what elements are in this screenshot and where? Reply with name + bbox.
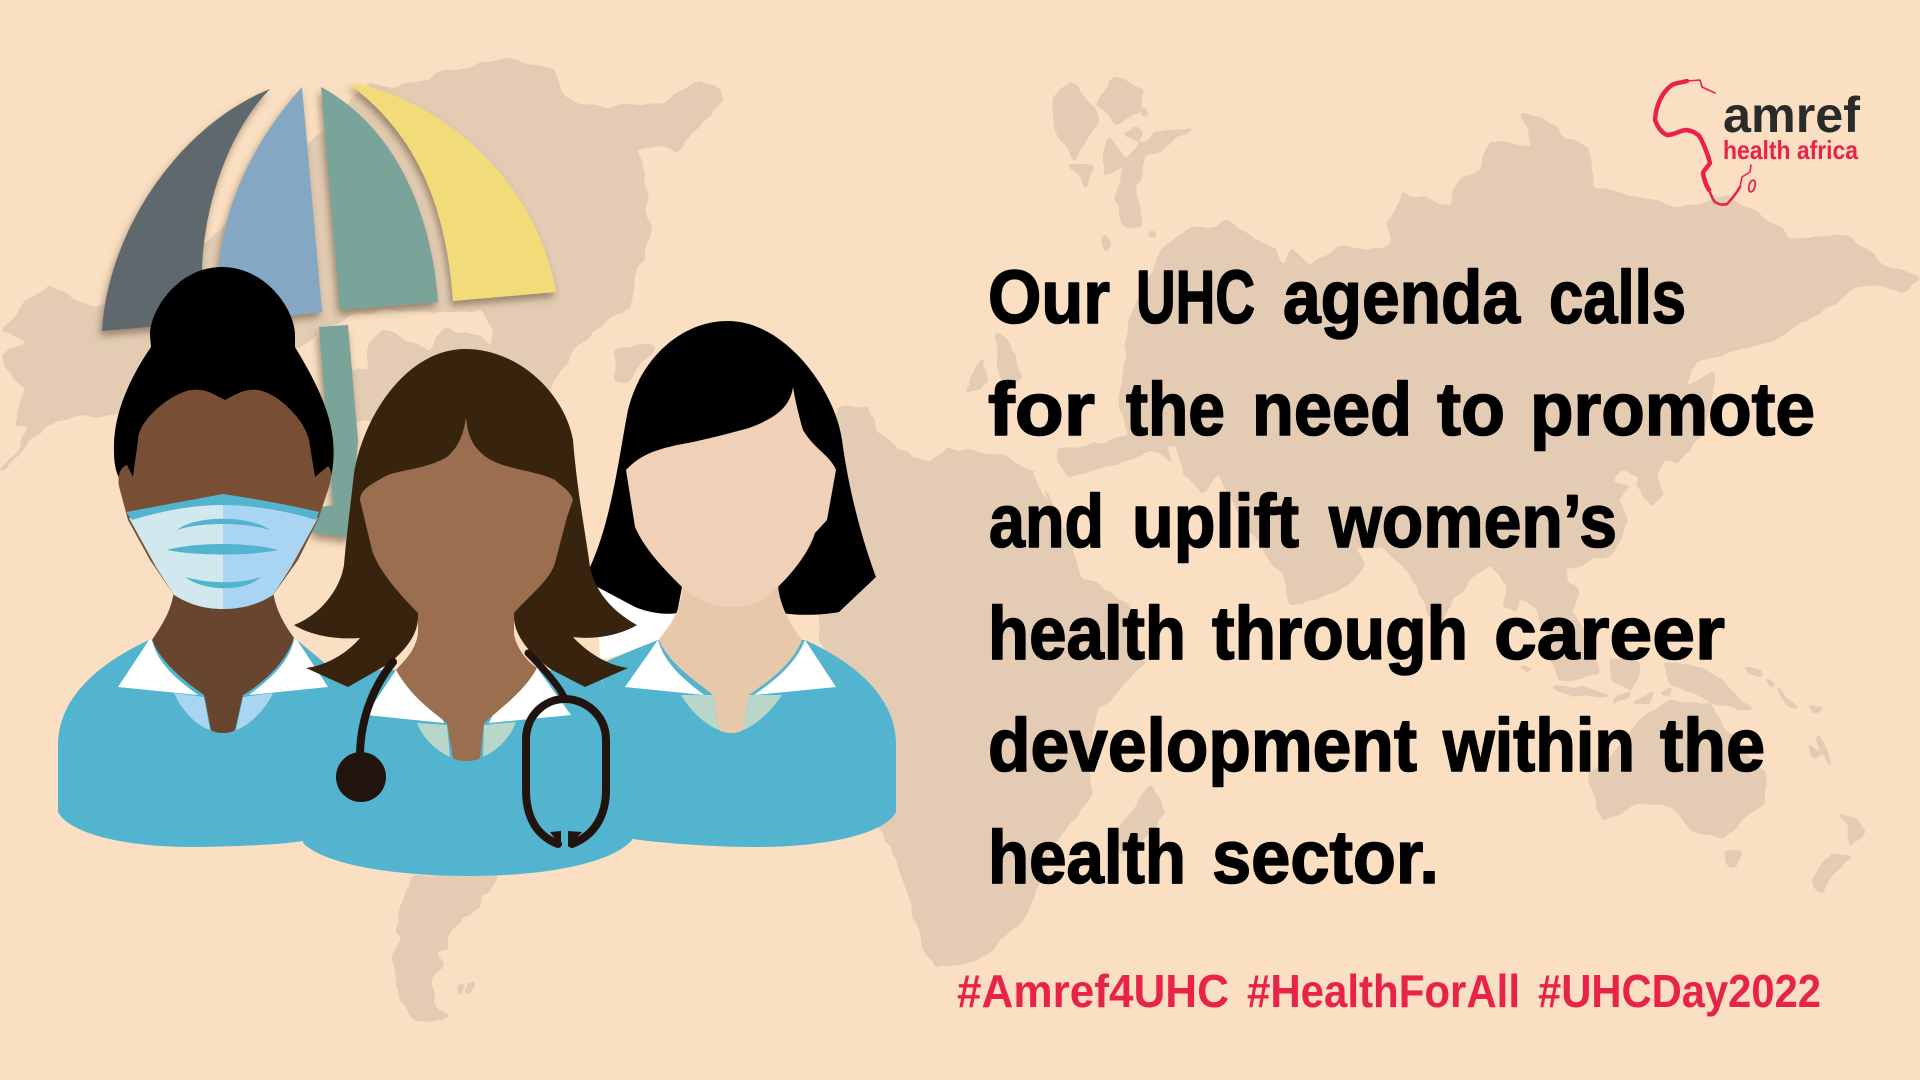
left nurse face	[118, 390, 331, 595]
message line 5: development	[988, 703, 1417, 787]
message line 2: the	[1126, 367, 1225, 451]
mask top band	[126, 494, 319, 520]
left nurse undershirt	[174, 693, 273, 730]
logo wordmark amref: amref	[1723, 87, 1860, 143]
map: indonesia and philippines	[1505, 585, 1830, 760]
message line 2: promote	[1530, 367, 1815, 451]
message line 4: through	[1212, 591, 1468, 675]
message line 1	[988, 255, 1686, 339]
left nurse body	[58, 640, 345, 847]
message line 6: health	[988, 815, 1186, 899]
person: centre doctor with stethoscope	[294, 349, 637, 876]
map: africa	[820, 408, 1143, 968]
right nurse face	[626, 387, 836, 607]
person: right nurse with black hair	[590, 321, 896, 847]
message line 2	[988, 367, 1815, 451]
left nurse neck	[152, 590, 294, 733]
hashtags: #HealthForAll	[1247, 965, 1520, 1017]
message line 1: agenda	[1283, 255, 1521, 339]
map gaps	[1033, 446, 1183, 500]
doctor hair	[294, 349, 637, 687]
doctor face	[360, 417, 573, 613]
message line 2: to	[1437, 367, 1505, 451]
right nurse back collar	[597, 588, 677, 660]
umbrella	[102, 83, 556, 538]
message line 1: UHC	[1136, 255, 1255, 339]
right nurse body	[600, 640, 896, 847]
message line 6	[988, 815, 1439, 899]
doctor collar	[366, 668, 571, 723]
umbrella canopy panel: blue	[214, 87, 322, 325]
message line 4: career	[1494, 591, 1725, 675]
stethoscope left tube	[360, 662, 393, 753]
map: eurasia	[1060, 113, 1920, 680]
map: north america	[0, 58, 720, 470]
stethoscope ear tips	[550, 831, 582, 847]
doctor undershirt	[417, 722, 516, 757]
stethoscope loop	[526, 699, 606, 844]
map: south america	[392, 875, 495, 1021]
map: madagascar	[1115, 787, 1164, 852]
map: tasmania	[1725, 852, 1742, 867]
person: left nurse with mask	[58, 267, 345, 847]
right nurse hair	[590, 321, 876, 615]
message line 3: and	[989, 479, 1104, 563]
message line 1: Our	[988, 255, 1110, 339]
logo africa outline	[1655, 80, 1756, 205]
logo: amref health africa	[1655, 80, 1860, 205]
logo wordmark health africa: health africa	[1723, 135, 1858, 165]
message line 1: calls	[1549, 255, 1686, 339]
map: new zealand	[1814, 813, 1866, 892]
umbrella canopy panel: grey	[102, 89, 270, 331]
left nurse hair and bun	[114, 267, 334, 480]
umbrella pole	[312, 325, 358, 538]
stethoscope	[336, 653, 606, 847]
message line 6: sector.	[1212, 815, 1439, 899]
message line 4: health	[988, 591, 1186, 675]
map: patch by right nurse	[617, 345, 653, 383]
stethoscope right tube	[528, 653, 564, 697]
message line 3	[989, 479, 1617, 563]
map: australia	[1591, 702, 1763, 838]
message line 4	[988, 591, 1725, 675]
message line 2: need	[1252, 367, 1412, 451]
umbrella canopy panel: yellow	[348, 83, 556, 301]
mask left half	[129, 500, 223, 609]
doctor neck	[396, 600, 537, 761]
hashtags	[957, 965, 1821, 1017]
message line 5	[988, 703, 1765, 787]
right nurse collar	[625, 640, 836, 695]
map: greenland and arctic islands	[1056, 78, 1193, 250]
message line 5: within	[1442, 703, 1635, 787]
stethoscope chest piece	[336, 752, 386, 802]
message line 3: uplift	[1132, 479, 1299, 563]
right nurse undershirt	[681, 695, 782, 730]
hashtags: #Amref4UHC	[957, 965, 1229, 1017]
hashtags: #UHCDay2022	[1538, 965, 1821, 1017]
mask pleats	[167, 519, 278, 588]
message line 5: the	[1660, 703, 1765, 787]
message line 3: women’s	[1328, 479, 1617, 563]
mask right half	[223, 500, 318, 609]
main message	[988, 255, 1815, 899]
right nurse neck	[659, 587, 802, 733]
surgical mask	[126, 494, 319, 609]
umbrella canopy panel: teal	[321, 87, 438, 310]
left nurse collar	[118, 640, 328, 695]
message line 2: for	[988, 367, 1095, 451]
map: iceland and uk	[965, 333, 1021, 392]
map: falkland islands	[459, 986, 476, 995]
doctor body	[303, 670, 632, 876]
